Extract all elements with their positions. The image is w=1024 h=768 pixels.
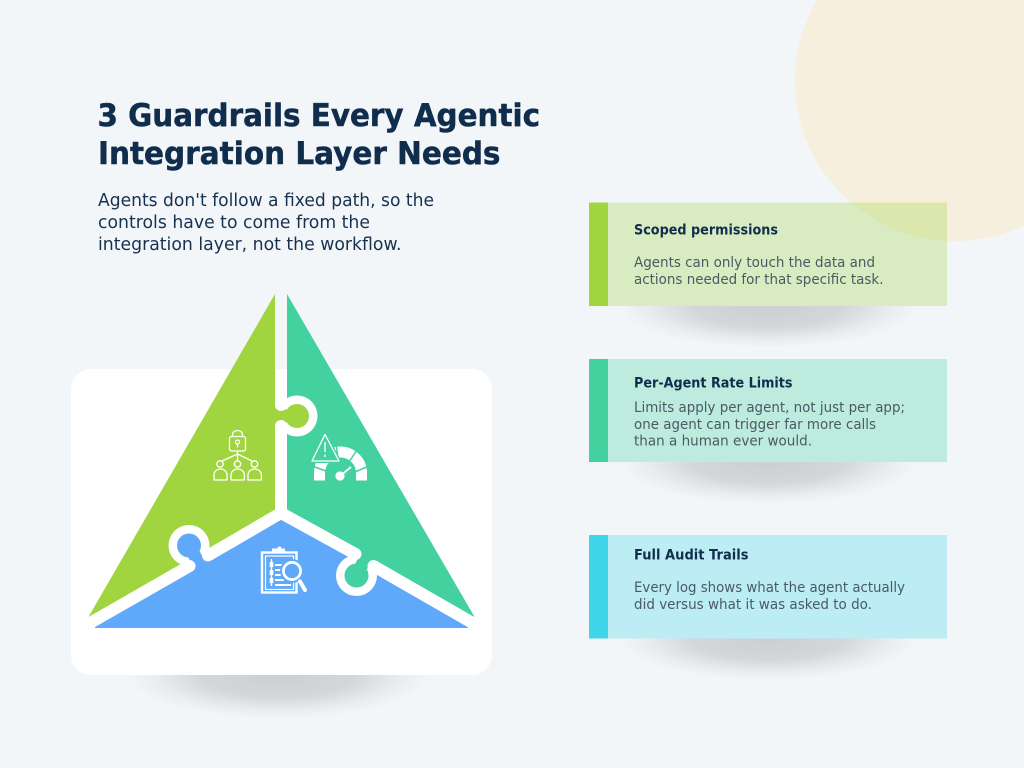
title: 3 Guardrails Every Agentic bbox=[98, 98, 540, 134]
panel: full audit trails: did versus what it was asked to do. bbox=[634, 597, 872, 613]
panel: per-agent rate limits: Limits apply per agent, not just per app; bbox=[634, 400, 905, 416]
panel: per-agent rate limits: one agent can trigger far more calls bbox=[634, 417, 876, 433]
panel: per-agent rate limits bbox=[589, 359, 947, 504]
title: Integration Layer Needs bbox=[98, 136, 500, 172]
subtitle text: Agents don't follow a fixed path, so the bbox=[98, 190, 434, 211]
piece: teal rate limit segment bbox=[281, 294, 477, 626]
icon: lock with three users bbox=[214, 430, 261, 480]
decorative beige circle bbox=[795, 0, 1024, 241]
panel: diagram card with shadow bbox=[71, 369, 492, 719]
panel: full audit trails: Full Audit Trails bbox=[634, 548, 748, 564]
panel: scoped permissions: actions needed for that specific task. bbox=[634, 272, 884, 288]
panel: scoped permissions: Scoped permissions bbox=[634, 222, 778, 238]
subtitle text: controls have to come from the bbox=[98, 212, 370, 233]
knob: teal bbox=[344, 555, 368, 588]
panel: scoped permissions: Agents can only touch the data and bbox=[634, 255, 875, 271]
panel: per-agent rate limits: Per-Agent Rate Limits bbox=[634, 376, 792, 392]
piece: blue audit segment bbox=[95, 513, 468, 628]
panel: full audit trails: Every log shows what the agent actually bbox=[634, 580, 905, 596]
icon: clipboard with magnifier bbox=[262, 546, 305, 592]
knob: blue bbox=[177, 534, 201, 567]
title bbox=[98, 98, 540, 172]
panel: per-agent rate limits: than a human ever would. bbox=[634, 434, 812, 450]
icon: warning triangle and gauge bbox=[312, 434, 369, 481]
knob: green bbox=[281, 404, 309, 428]
subtitle text bbox=[98, 190, 434, 255]
piece: green permissions segment bbox=[86, 294, 281, 625]
subtitle text: integration layer, not the workflow. bbox=[98, 234, 402, 255]
puzzle triangle bbox=[86, 294, 477, 628]
panel: scoped permissions bbox=[589, 202, 947, 348]
panel: full audit trails bbox=[589, 535, 947, 680]
